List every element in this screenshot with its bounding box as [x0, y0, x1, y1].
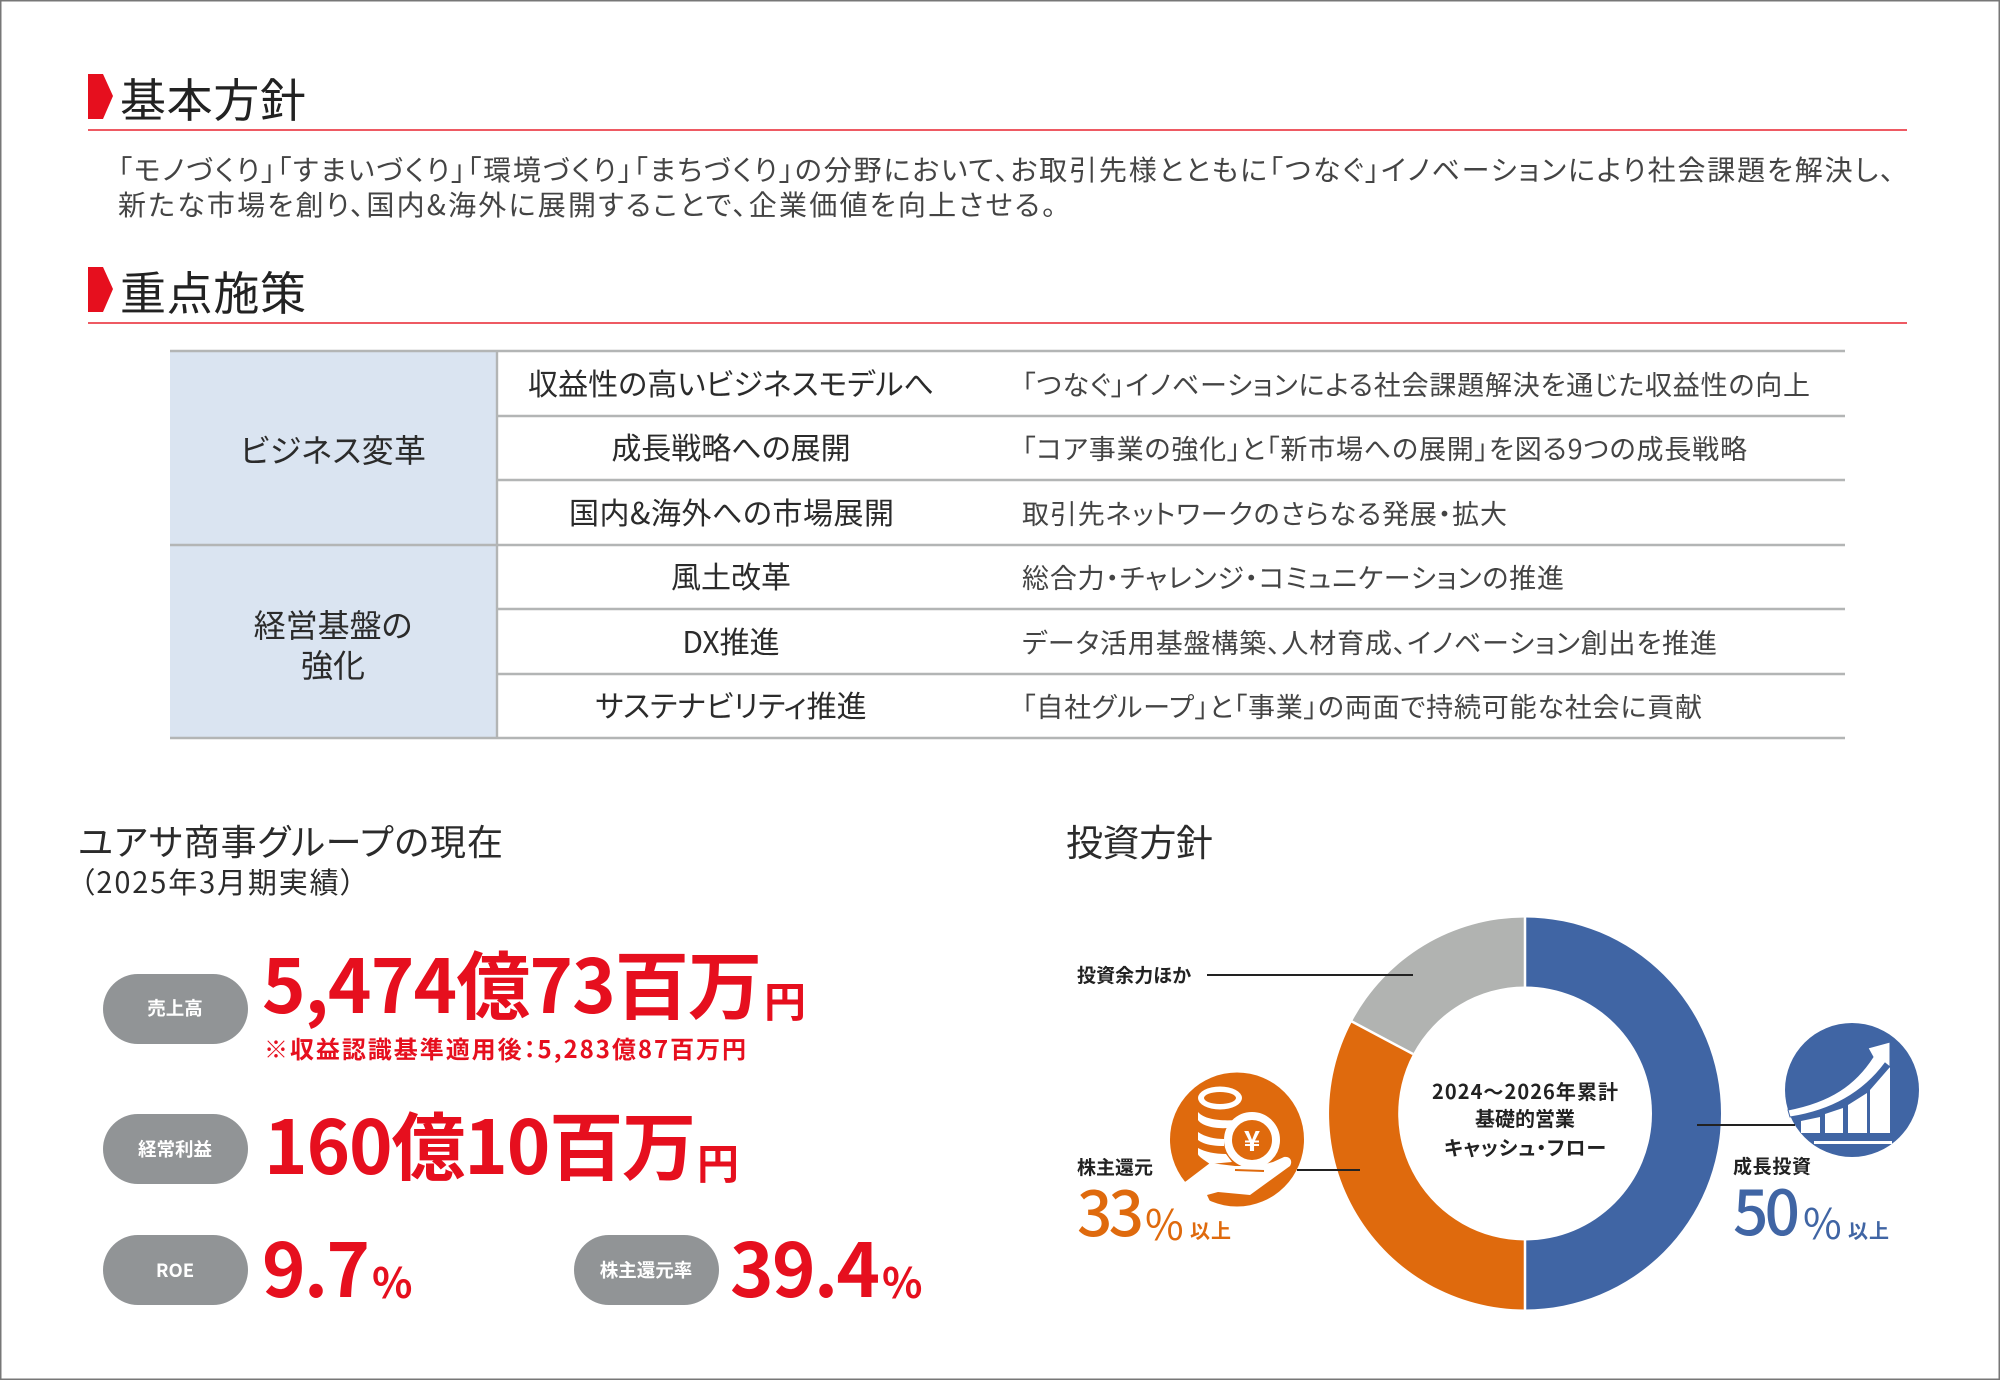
label: investment capacity: 投資余力ほか — [1077, 961, 1191, 988]
donut centre label: 基礎的営業 — [1475, 1103, 1575, 1132]
label: growth investment 50%: 成長投資 — [1733, 1152, 1811, 1179]
heading: 重点施策: 重点施策 — [120, 258, 306, 324]
metric: ordinary profit: 円 — [697, 1131, 739, 1192]
metric: ordinary profit — [103, 1089, 739, 1196]
metric: net sales: ※収益認識基準適用後：5,283億87百万円 — [264, 1030, 746, 1065]
donut centre label: 2024～2026年累計 — [1432, 1076, 1618, 1105]
label: shareholder return 33% — [1077, 1153, 1360, 1254]
metric: net sales — [103, 928, 806, 1065]
bars — [1801, 1067, 1890, 1133]
label: growth investment 50%: % — [1803, 1191, 1842, 1252]
heading: investment policy: 投資方針 — [1066, 813, 1213, 867]
table rows: measure descriptions: 総合力・チャレンジ・コミュニケーションの推進 — [1022, 557, 1564, 596]
metric: net sales: 売上高 — [147, 995, 203, 1021]
heading: current group results: （2025年3月期実績） — [80, 860, 355, 902]
metric: ROE: ROE — [156, 1257, 194, 1283]
label: shareholder return 33%: 株主還元 — [1077, 1153, 1153, 1180]
table rows: measure names — [528, 360, 934, 726]
table group: business transformation: ビジネス変革 — [240, 426, 426, 472]
metric: ROE: % — [372, 1250, 412, 1311]
yen coin — [1228, 1116, 1276, 1164]
table: priority measures — [170, 351, 1845, 738]
table rows: measure descriptions: 「コア事業の強化」と「新市場への展開」を図る9つの成長戦略 — [1022, 428, 1747, 467]
donut chart: cash flow allocation — [1329, 915, 1721, 1312]
table rows: measure names: 国内&海外への市場展開 — [569, 489, 894, 533]
metric: shareholder return ratio: 39.4 — [730, 1212, 880, 1319]
table rows: measure descriptions: 「自社グループ」と「事業」の両面で持続可能な社会に貢献 — [1022, 686, 1702, 725]
text block: basic policy — [118, 149, 1894, 224]
segment: investment capacity — [1352, 918, 1525, 1054]
table rows: measure names: 収益性の高いビジネスモデルへ — [528, 360, 934, 404]
table rows: measure descriptions — [1022, 364, 1810, 725]
metric: ROE — [103, 1212, 412, 1319]
icon: growth chart — [1785, 1023, 1919, 1157]
coin stack — [1198, 1086, 1242, 1164]
hand — [1165, 1157, 1291, 1215]
metric: net sales: 5,474億73百万 — [262, 928, 762, 1035]
label: shareholder return 33%: % — [1145, 1192, 1184, 1253]
heading: 基本方針 — [88, 65, 1907, 131]
label: growth investment 50% — [1697, 1124, 1889, 1253]
table rows: measure descriptions: データ活用基盤構築、人材育成、イノベーション創出を推進 — [1022, 622, 1717, 661]
table group: management foundation: 強化 — [301, 641, 365, 687]
icon: coins in hand: ¥ — [1244, 1120, 1261, 1160]
donut centre label: キャッシュ・フロー — [1444, 1132, 1606, 1161]
heading: 重点施策 — [88, 258, 1907, 324]
metric: shareholder return ratio: 株主還元率 — [600, 1257, 692, 1283]
metric: shareholder return ratio — [574, 1212, 922, 1319]
table rows: measure names: 成長戦略への展開 — [611, 424, 851, 468]
label: growth investment 50%: 50 — [1733, 1163, 1800, 1253]
table group: management foundation: 経営基盤の — [254, 601, 412, 647]
donut centre label — [1432, 1076, 1618, 1161]
text block: basic policy: 「モノづくり」「すまいづくり」「環境づくり」「まちづくり」の分野において、お取引先様とともに「つなぐ」イノベーションにより社会課題を解決し、 — [118, 149, 1894, 189]
table rows: measure names: DX推進 — [682, 618, 780, 662]
label: shareholder return 33%: 33 — [1077, 1164, 1144, 1254]
table group: management foundation — [254, 601, 412, 687]
text block: basic policy: 新たな市場を創り、国内&海外に展開することで、企業価値を向上させる。 — [118, 184, 1056, 224]
label: growth investment 50%: 以上 — [1848, 1215, 1889, 1244]
table rows: measure descriptions: 取引先ネットワークのさらなる発展・拡大 — [1022, 493, 1507, 532]
segment: growth investment 50% — [1525, 918, 1721, 1310]
segment: shareholder return 33% — [1329, 1022, 1525, 1310]
metric: shareholder return ratio: % — [882, 1250, 922, 1311]
metric: ordinary profit: 経常利益 — [138, 1136, 212, 1162]
icon: coins in hand — [1165, 1072, 1304, 1215]
heading: current group results: ユアサ商事グループの現在 — [78, 814, 503, 866]
metric: ROE: 9.7 — [262, 1212, 370, 1319]
table rows: measure names: 風土改革 — [671, 553, 791, 597]
heading: 基本方針: 基本方針 — [120, 65, 306, 131]
table rows: measure names: サステナビリティ推進 — [595, 682, 867, 726]
rising arrow — [1788, 1042, 1890, 1117]
heading: current group results — [78, 814, 503, 902]
table rows: measure descriptions: 「つなぐ」イノベーションによる社会課題解決を通じた収益性の向上 — [1022, 364, 1810, 403]
label: shareholder return 33%: 以上 — [1190, 1215, 1231, 1244]
metric: ordinary profit: 160億10百万 — [264, 1089, 696, 1196]
metric: net sales: 円 — [764, 969, 806, 1030]
